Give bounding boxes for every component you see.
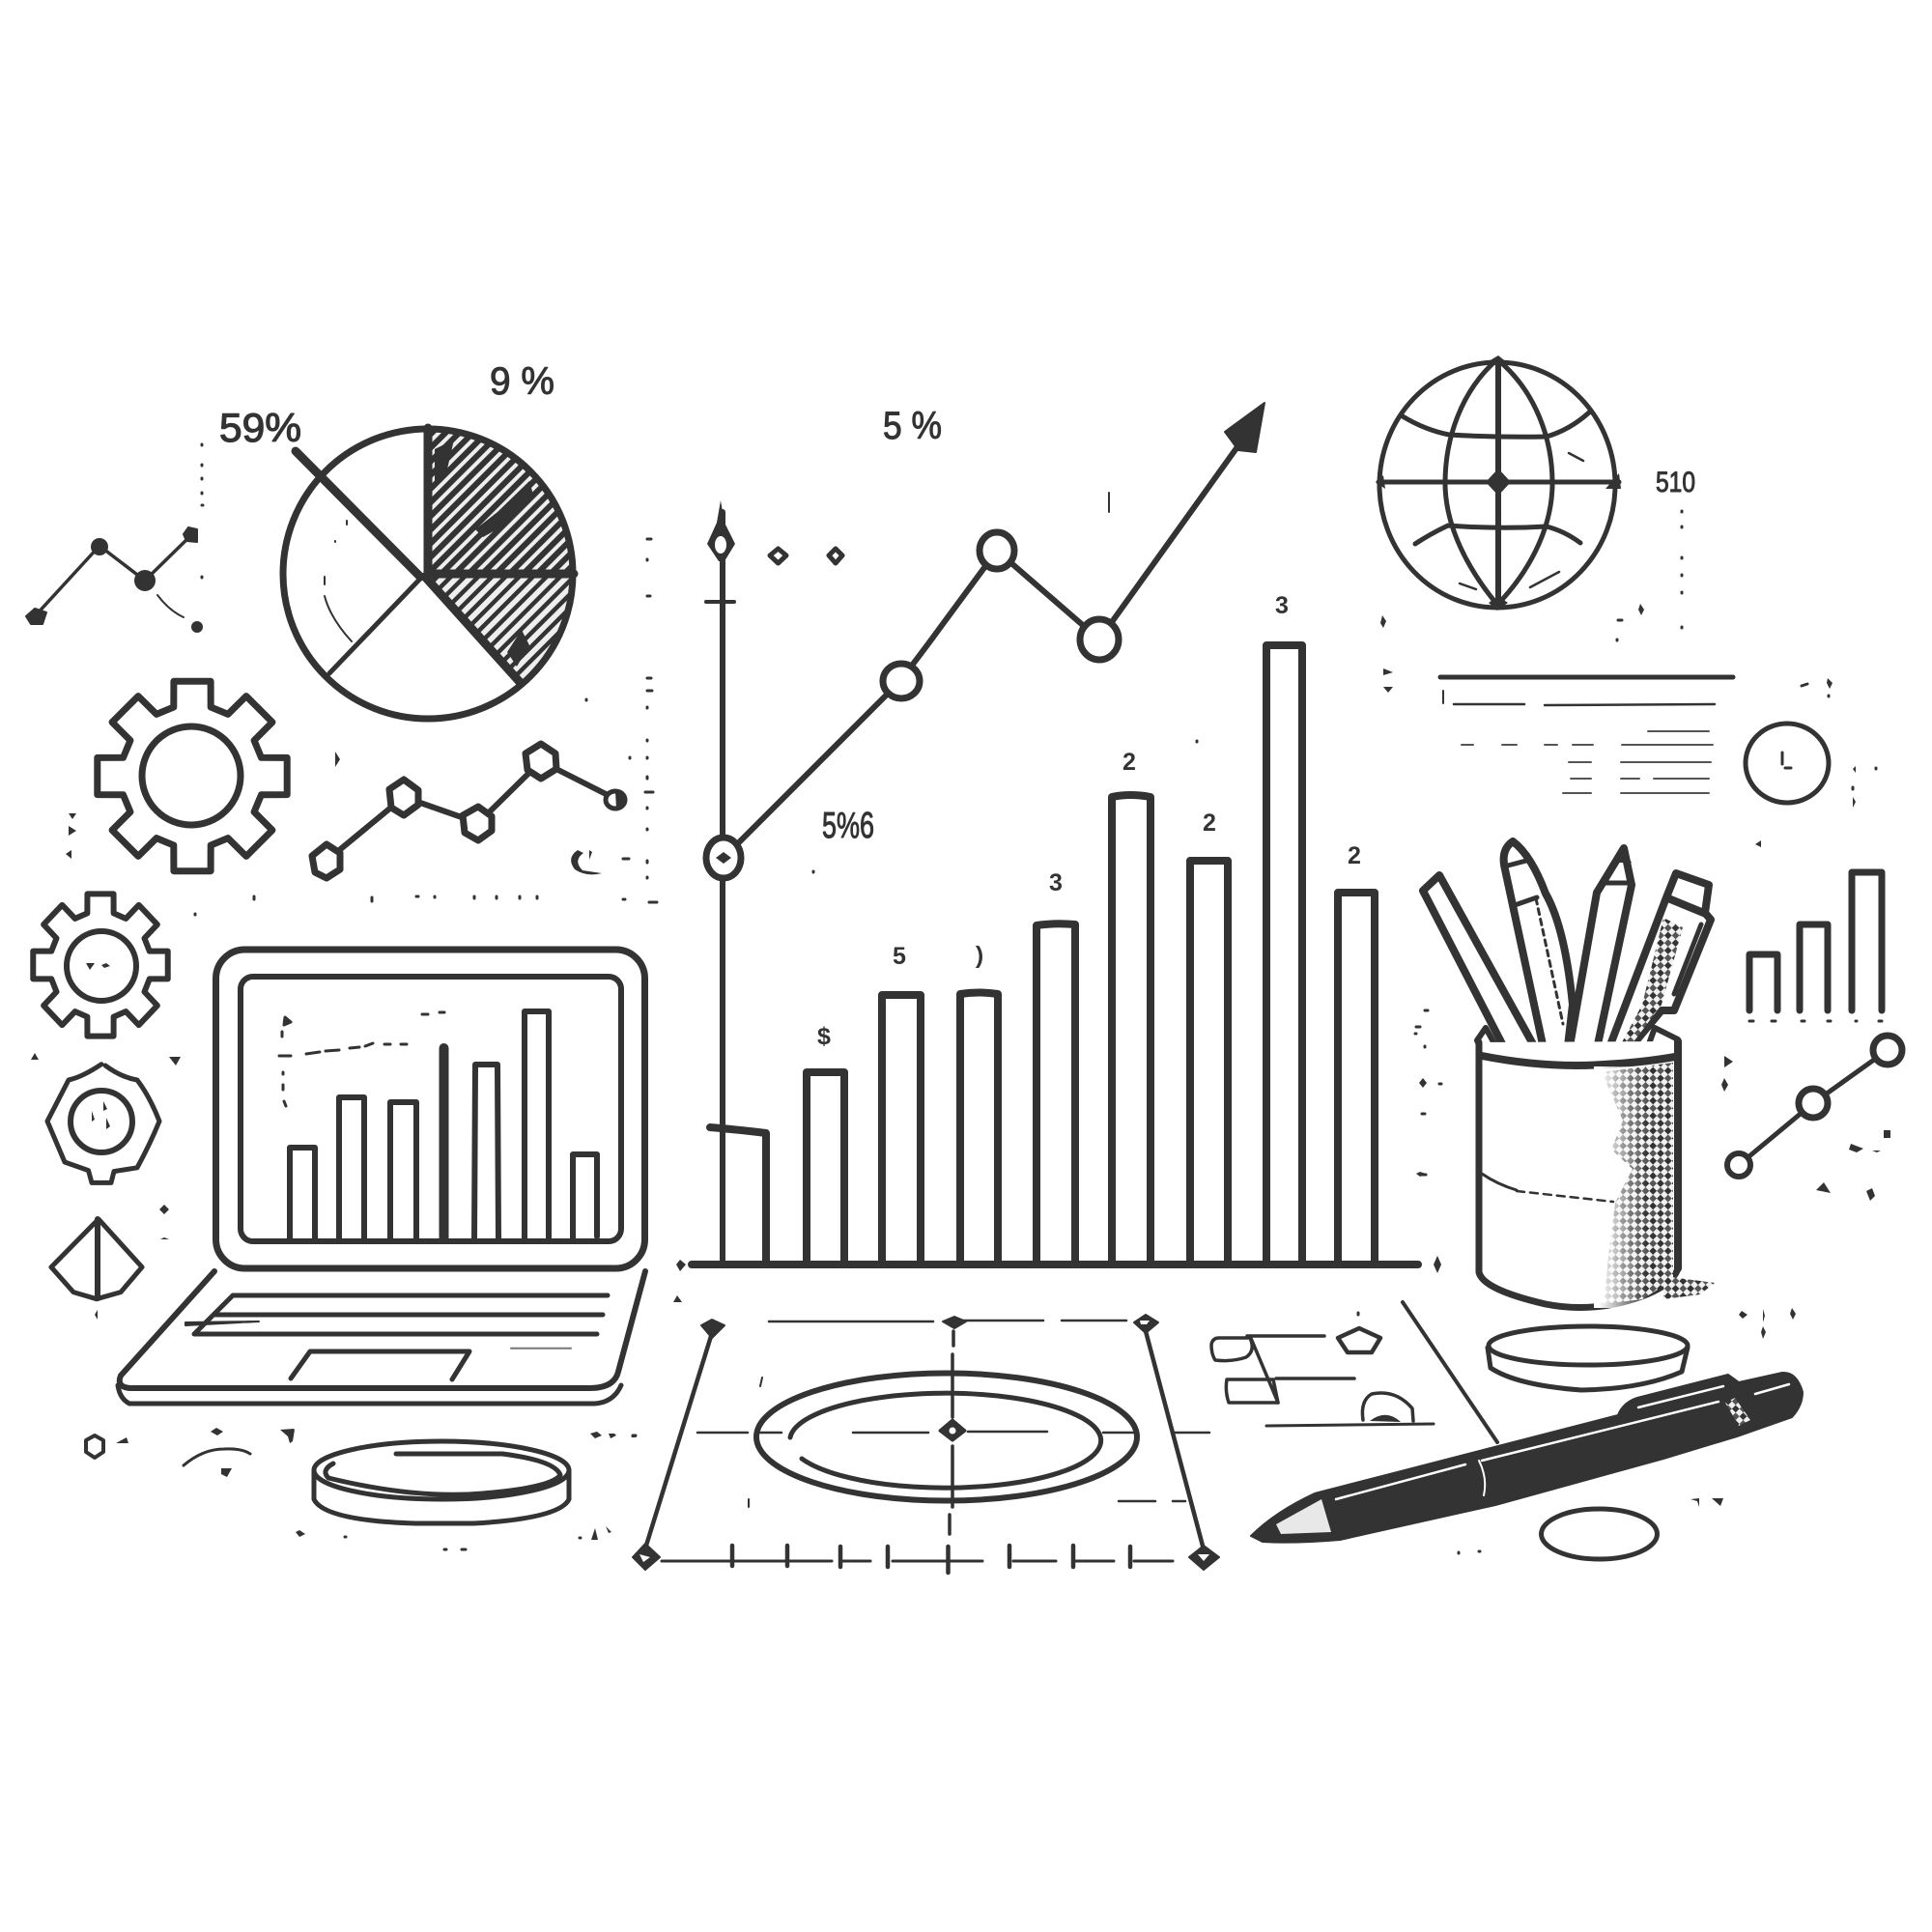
node: second <box>883 664 920 698</box>
globe <box>1376 355 1621 611</box>
pie chart <box>283 428 574 719</box>
small line chart, top left <box>26 527 203 633</box>
nodes <box>26 609 46 624</box>
end dot and arc <box>157 595 184 617</box>
pen: highlights <box>1336 1384 1789 1499</box>
pencils in cup <box>1423 841 1715 1308</box>
clock circle, right <box>1746 724 1829 803</box>
bars <box>710 645 1375 1263</box>
cup: shadow spill <box>1663 1276 1715 1299</box>
pie: hatched lower sector <box>428 574 574 682</box>
node: axis <box>706 838 741 878</box>
pie: lower-left spoke <box>329 577 422 673</box>
bar value labels <box>817 592 1361 1050</box>
gear 3 <box>47 1065 159 1182</box>
gear 1 <box>98 681 287 871</box>
bar value labels: 3 <box>1049 869 1063 896</box>
label: 9 %: 9 % <box>490 360 554 403</box>
node: third <box>980 532 1014 569</box>
diamond icon <box>51 1219 142 1299</box>
label: 510: 510 <box>1656 467 1695 498</box>
node: fourth <box>1080 619 1119 660</box>
coin, under cup <box>1488 1326 1688 1390</box>
pencil 4 <box>1604 873 1711 1063</box>
blueprint: crosshair lines <box>950 1331 953 1534</box>
pencil 3 <box>1567 848 1632 1063</box>
pie: hatched upper sector <box>428 428 574 574</box>
laptop: base <box>120 1271 645 1388</box>
laptop <box>118 950 645 1404</box>
bar value labels: $ <box>817 1023 831 1050</box>
globe: small strokes <box>1460 453 1583 589</box>
pie: inner dashed arc <box>325 521 352 641</box>
ellipse, below pen <box>1542 1509 1658 1559</box>
connected nodes, right <box>1727 1036 1902 1177</box>
specks and small marks <box>31 444 1890 1553</box>
rising trend line with arrow <box>706 403 1264 878</box>
bar value labels: 2 <box>1203 810 1216 837</box>
pencil 2 <box>1504 841 1573 1063</box>
laptop: screen bar chart <box>290 1011 597 1239</box>
chart nodes <box>312 744 556 878</box>
blueprint: corner node holes <box>639 1321 1209 1562</box>
gear 2 <box>33 894 168 1037</box>
laptop: keyboard <box>194 1295 608 1334</box>
label: 5%6: 5%6 <box>822 806 874 846</box>
laptop: lower lip <box>118 1385 621 1404</box>
laptop: lid <box>216 950 645 1268</box>
cup <box>1477 1028 1715 1308</box>
blueprint: outer oval <box>756 1374 1137 1501</box>
blueprint: bottom ruler <box>662 1559 1173 1563</box>
pie: spokes <box>296 428 574 682</box>
globe: parallels <box>1378 412 1619 544</box>
arrow head <box>1225 403 1264 452</box>
bar value labels: 5 <box>893 943 906 970</box>
baseline <box>692 1261 1418 1268</box>
main bar chart <box>692 592 1418 1264</box>
coin, lower left <box>314 1441 569 1523</box>
blueprint: side rails <box>645 1331 1204 1549</box>
blueprint: centre node <box>940 1420 965 1440</box>
cup: shaded side <box>1602 1063 1673 1304</box>
table lines, right <box>1440 677 1733 793</box>
small rings <box>770 549 842 563</box>
pie: outline <box>283 429 573 719</box>
laptop: screen <box>241 977 621 1241</box>
pen <box>1251 1373 1803 1543</box>
globe: pole and centre diamonds <box>1376 355 1621 611</box>
laptop: screen marks <box>279 1043 407 1056</box>
line chart, middle left <box>312 744 625 878</box>
y axis with torch marker <box>706 500 735 1263</box>
cup: shading fade <box>1594 1066 1652 1308</box>
axis torch top <box>707 500 735 561</box>
mini bar chart, right <box>1749 872 1882 1010</box>
blueprint diagram <box>633 1315 1219 1573</box>
pie: dark scribble patches <box>435 440 533 667</box>
blueprint: corner nodes <box>633 1315 1219 1570</box>
bar value labels: ) <box>976 942 983 969</box>
pencil 1 <box>1423 875 1538 1063</box>
laptop: trackpad <box>291 1351 469 1379</box>
globe: meridians <box>1445 359 1552 605</box>
bar value labels: 2 <box>1348 842 1361 869</box>
label: 5 %: 5 % <box>883 405 942 447</box>
pen: tip <box>1276 1499 1331 1534</box>
pen: ferrule <box>1725 1398 1750 1426</box>
cup: dashed band <box>1482 1174 1517 1190</box>
flow diagram <box>1211 1302 1497 1442</box>
pen: barrel ring <box>1479 1461 1485 1495</box>
bar value labels: 2 <box>1122 749 1136 776</box>
label: 59%: 59% <box>219 405 301 450</box>
blueprint: inner oval <box>790 1393 1101 1488</box>
bar value labels: 3 <box>1275 592 1289 619</box>
